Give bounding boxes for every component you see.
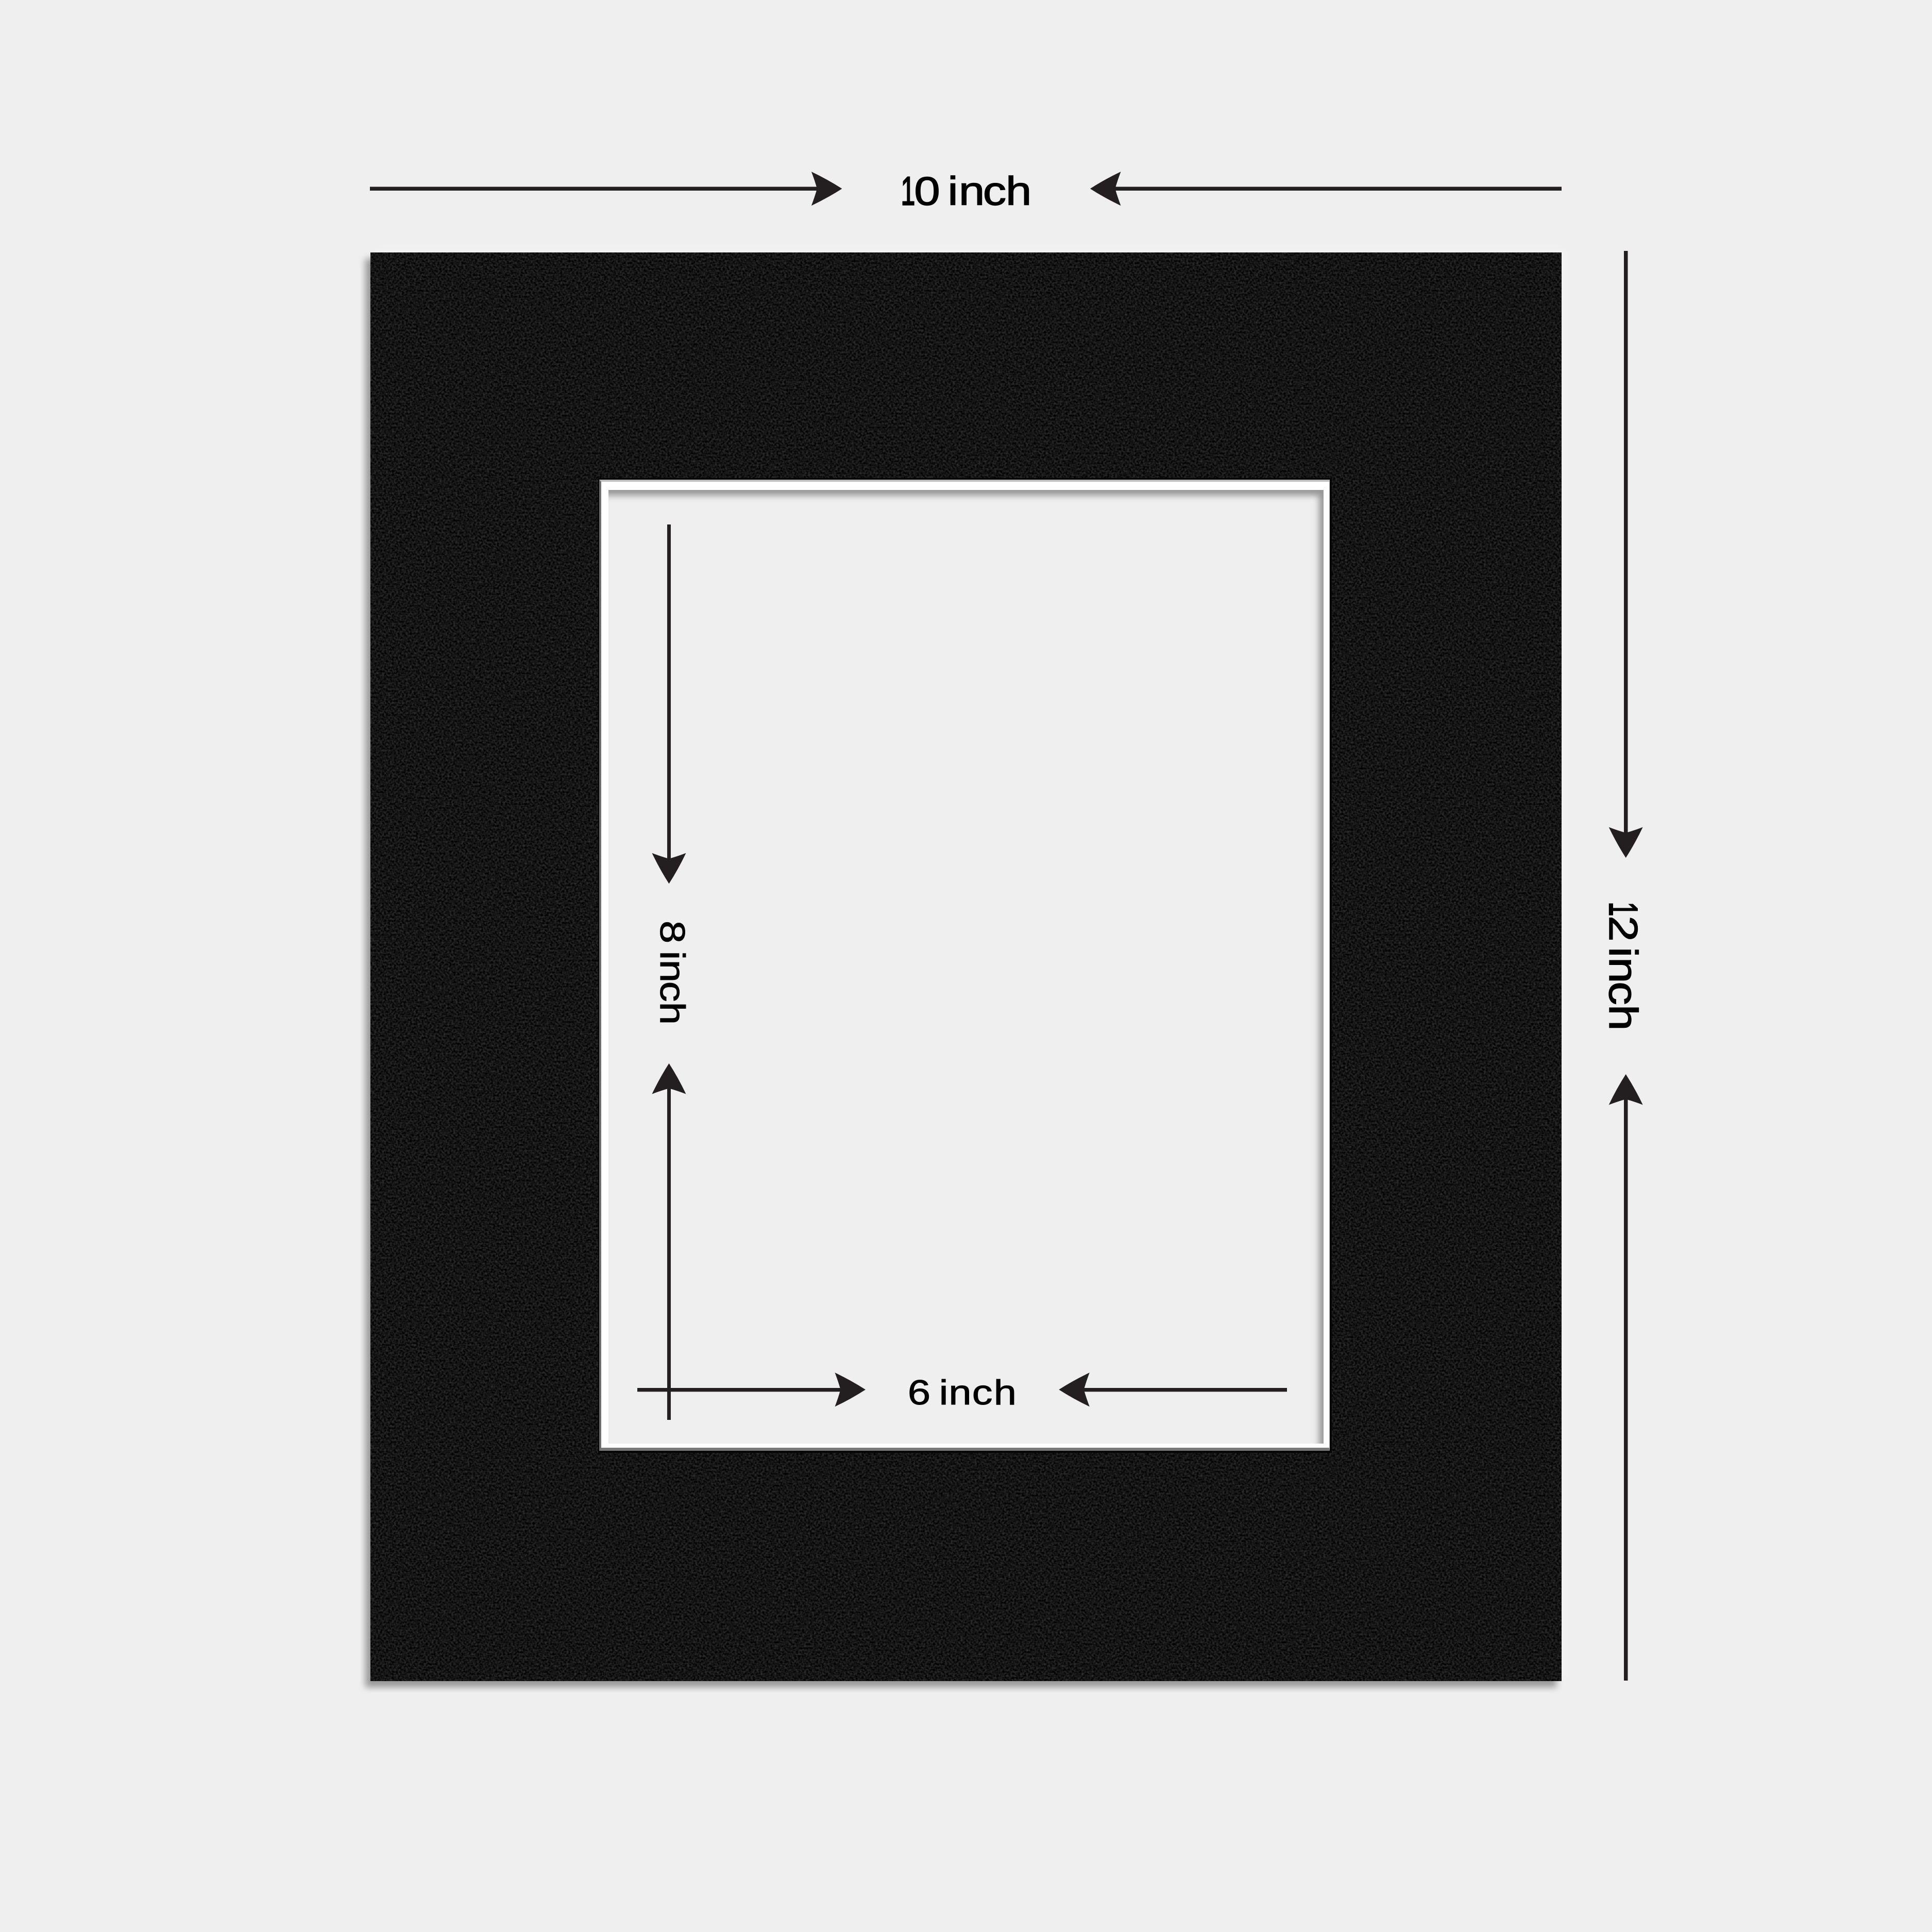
window cut-out: dark outer edge [598, 478, 1332, 1453]
window cut-out: opening with inner shadow [608, 490, 1324, 1444]
panel: black mat board [370, 252, 1562, 1681]
arrow: opening width, right side [1059, 1372, 1287, 1406]
label: 6 inch: 6 inch [908, 1372, 1016, 1412]
arrow: right height, top side [1609, 251, 1643, 858]
arrow: opening height, bottom side [652, 1063, 686, 1420]
label: 12 inch: 1 [1601, 902, 1646, 916]
window cut-out: white bevel [599, 480, 1330, 1451]
label: 12 inch: 2 inch [1601, 916, 1646, 1030]
arrow: top width, right side [1090, 172, 1562, 206]
arrow: right height, bottom side [1609, 1074, 1643, 1681]
label: 8 inch: 8 inch [653, 921, 692, 1025]
arrow: opening width, left side [637, 1372, 866, 1406]
arrow: top width, left side [370, 172, 842, 206]
arrow: opening height, top side [652, 524, 686, 884]
label: 10 inch: 0 inch [914, 169, 1031, 213]
label: 10 inch: 1 [901, 169, 915, 213]
